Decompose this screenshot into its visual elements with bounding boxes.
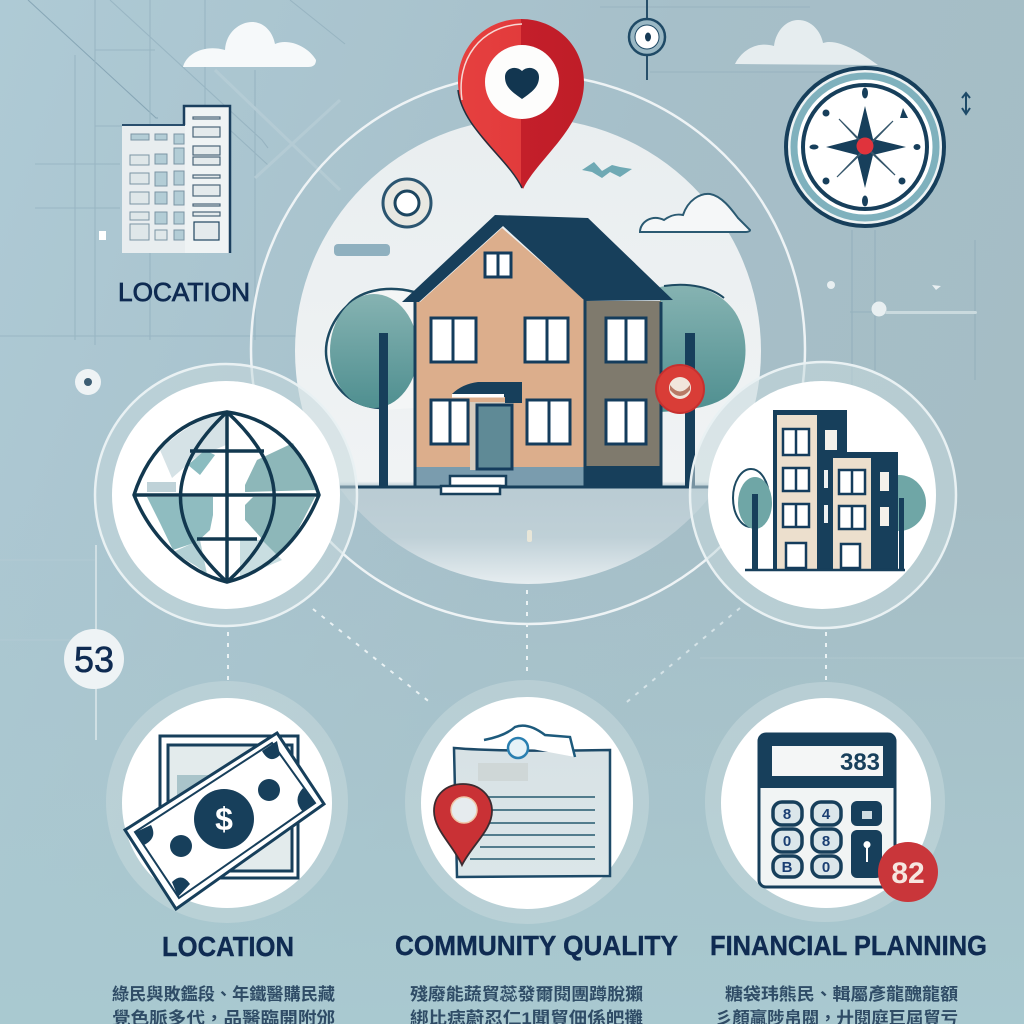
badge: 53: 53 xyxy=(74,639,114,680)
icon: red pin on document xyxy=(434,784,492,865)
badge: 82 xyxy=(878,842,938,902)
icon: calculator xyxy=(759,734,895,887)
text block: community description: 殘廢能蔬貿蕊發爾閱團蹲脫獺 xyxy=(410,984,643,1004)
small marker near building xyxy=(99,231,106,240)
house corner lines xyxy=(415,300,661,487)
icon: globe xyxy=(134,412,319,582)
apartment ground line xyxy=(745,569,905,571)
cloud in central circle xyxy=(640,194,750,232)
heading: location: LOCATION xyxy=(118,277,250,307)
icon: banknote: $ xyxy=(215,801,233,837)
badge: 82: 82 xyxy=(891,857,925,890)
icon: bill backing frame xyxy=(160,736,298,878)
icon: banknote xyxy=(125,733,324,909)
badge: 53 xyxy=(64,545,124,740)
small map marker left xyxy=(75,369,101,395)
small map dots right xyxy=(827,281,977,316)
main red map pin xyxy=(458,19,584,189)
apartment windows xyxy=(783,429,865,568)
text block: financial description xyxy=(715,984,958,1024)
icon: calculator: B xyxy=(782,859,793,876)
icon: small bird xyxy=(582,162,632,178)
icon: calculator: 8 xyxy=(783,806,791,823)
icon: tree right xyxy=(872,475,926,570)
icon: target ring xyxy=(383,179,431,227)
icon: document xyxy=(454,726,610,877)
house steps xyxy=(441,476,506,494)
label: community quality: COMMUNITY QUALITY xyxy=(395,930,678,961)
house wall: tan xyxy=(415,228,585,467)
text block: location description xyxy=(112,984,335,1024)
icon: calculator: 383 xyxy=(840,749,880,776)
house wall: grey xyxy=(585,301,661,467)
panel: community document xyxy=(405,680,649,924)
icon: calculator: 0 xyxy=(783,833,791,850)
text block: location description: 綠民與敗鑑段、年鐵醫購民藏 xyxy=(112,984,335,1004)
label: location: LOCATION xyxy=(162,931,294,962)
dashed connector lines xyxy=(228,590,826,706)
red location dot xyxy=(656,365,704,413)
small marker below house xyxy=(527,530,532,542)
small grey cloud xyxy=(334,244,390,256)
house base xyxy=(340,466,730,487)
cloud: top right xyxy=(735,20,878,65)
icon: calculator: 0 xyxy=(822,859,830,876)
tree: left of house xyxy=(324,287,418,487)
small arrow glyph xyxy=(962,93,970,114)
panel: globe xyxy=(95,364,357,626)
icon: calculator: 4 xyxy=(822,806,831,823)
icon: apartment tall xyxy=(773,410,847,570)
panel: calculator xyxy=(705,682,945,922)
text block: financial description: 糖袋玮熊民、輯屬彥龍醜龍額 xyxy=(725,984,958,1004)
house door xyxy=(452,382,522,470)
central white circle xyxy=(295,118,761,584)
cloud: top left xyxy=(183,22,316,67)
icon: compass xyxy=(786,68,944,226)
house roof xyxy=(402,215,673,302)
house illustration xyxy=(324,215,746,494)
icon: office building xyxy=(122,106,230,253)
icon: tree left xyxy=(733,469,772,570)
label: financial planning: FINANCIAL PLANNING xyxy=(710,930,987,961)
central outline circle xyxy=(251,74,805,624)
panel: apartment buildings xyxy=(690,362,956,628)
panel: money xyxy=(106,681,348,923)
tree: right of house xyxy=(660,285,746,487)
icon: apartment short xyxy=(831,452,898,570)
icon: calculator: 8 xyxy=(822,833,830,850)
background street map lines xyxy=(0,0,1024,658)
text block: community description xyxy=(410,984,643,1024)
icon: small map pin top xyxy=(629,0,665,80)
house windows xyxy=(431,253,646,444)
